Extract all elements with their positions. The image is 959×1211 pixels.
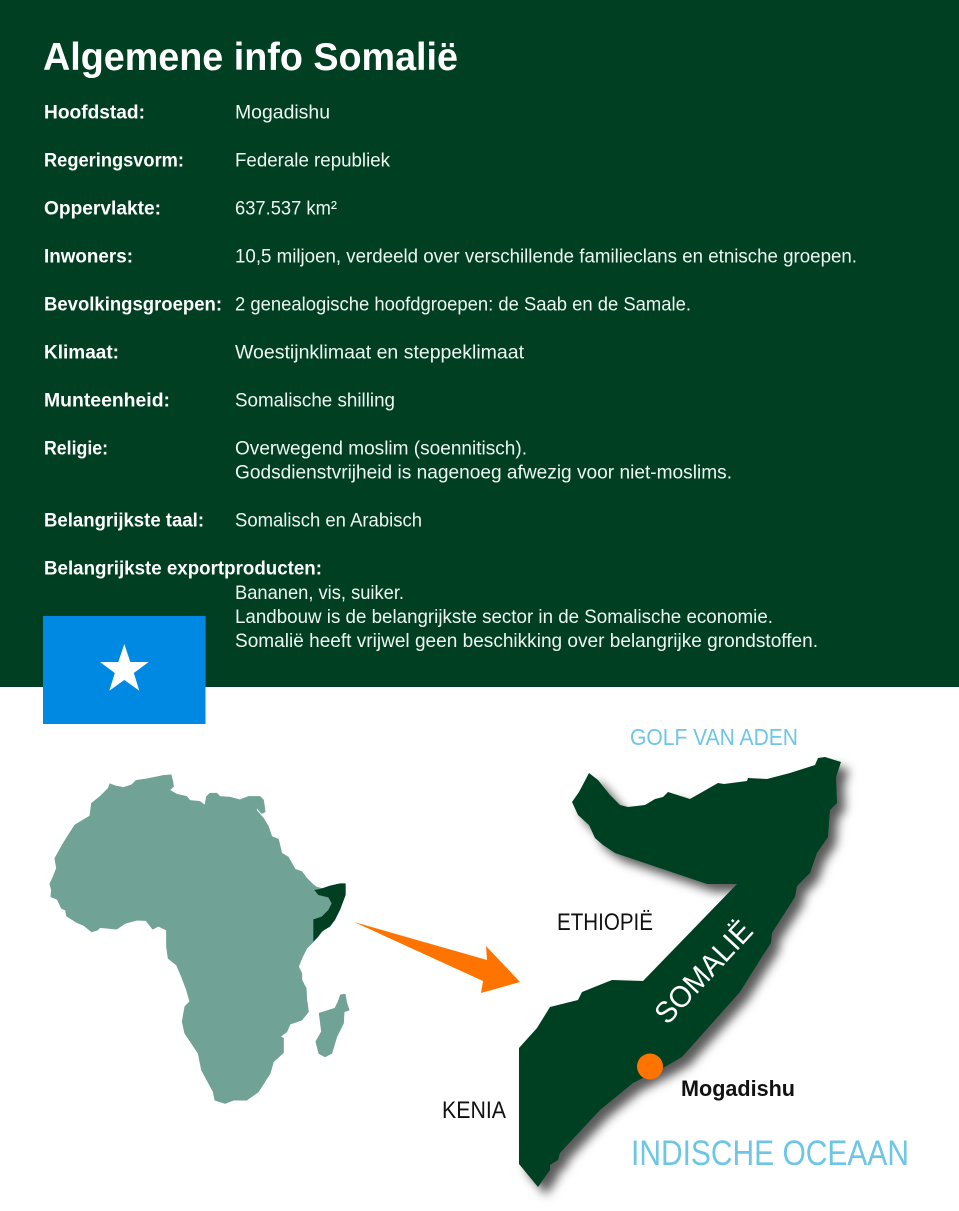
fact: capital: Mogadishu (235, 102, 330, 124)
fact: climate (44, 342, 525, 364)
fact: currency: Somalische shilling (235, 390, 395, 412)
fact: climate: Woestijnklimaat en steppeklimaat (235, 342, 525, 364)
fact: inhabitants: 10,5 miljoen, verdeeld over verschillende familieclans en etnische groepen. (235, 246, 857, 268)
label: Somalië: SOMALIË (648, 914, 760, 1031)
Madagascar (316, 994, 349, 1057)
fact: religion: Godsdienstvrijheid is nagenoeg afwezig voor niet-moslims. (235, 462, 732, 484)
fact: language (44, 510, 422, 532)
label: Mogadishu: Mogadishu (681, 1076, 795, 1101)
fact: population groups: Bevolkingsgroepen: (44, 294, 222, 316)
arrow (354, 922, 520, 993)
label: Golf van Aden: GOLF VAN ADEN (630, 724, 798, 750)
fact: government: Regeringsvorm: (44, 150, 184, 172)
fact: currency: Munteenheid: (44, 390, 170, 412)
fact: language: Somalisch en Arabisch (235, 510, 422, 532)
fact: religion: Overwegend moslim (soennitisch). (235, 438, 527, 460)
fact: inhabitants: Inwoners: (44, 246, 133, 268)
fact: area: Oppervlakte: (44, 198, 161, 220)
fact: language: Belangrijkste taal: (44, 510, 204, 532)
title: Algemene info Somalië (43, 36, 458, 79)
label: Indische Oceaan: INDISCHE OCEAAN (631, 1134, 909, 1173)
fact: exports: Landbouw is de belangrijkste sector in de Somalische economie. (235, 606, 773, 628)
fact: currency (44, 390, 395, 412)
icon: Somali flag (43, 616, 206, 724)
Africa mainland (50, 775, 335, 1103)
fact: government (44, 150, 390, 172)
fact: religion (44, 438, 732, 484)
fact: exports (44, 558, 818, 652)
map: Africa (50, 775, 349, 1103)
panel: header background (0, 0, 959, 687)
map: Somalia (519, 757, 841, 1187)
fact: area: 637.537 km² (235, 198, 337, 220)
fact: religion: Religie: (44, 438, 108, 460)
label: Kenia: KENIA (442, 1097, 506, 1124)
fact: population groups: 2 genealogische hoofdgroepen: de Saab en de Samale. (235, 294, 691, 316)
label: Ethiopië: ETHIOPIË (557, 909, 653, 936)
panel: fact list (44, 102, 857, 652)
fact: government: Federale republiek (235, 150, 390, 172)
fact: population groups (44, 294, 691, 316)
fact: climate: Klimaat: (44, 342, 119, 364)
fact: exports: Bananen, vis, suiker. (235, 582, 404, 604)
fact: capital (44, 102, 330, 124)
marker: Mogadishu (637, 1054, 663, 1080)
fact: area (44, 198, 337, 220)
fact: exports: Belangrijkste exportproducten: (44, 558, 322, 580)
Somalia highlight (313, 883, 346, 942)
fact: exports: Somalië heeft vrijwel geen beschikking over belangrijke grondstoffen. (235, 630, 818, 652)
fact: capital: Hoofdstad: (44, 102, 145, 124)
